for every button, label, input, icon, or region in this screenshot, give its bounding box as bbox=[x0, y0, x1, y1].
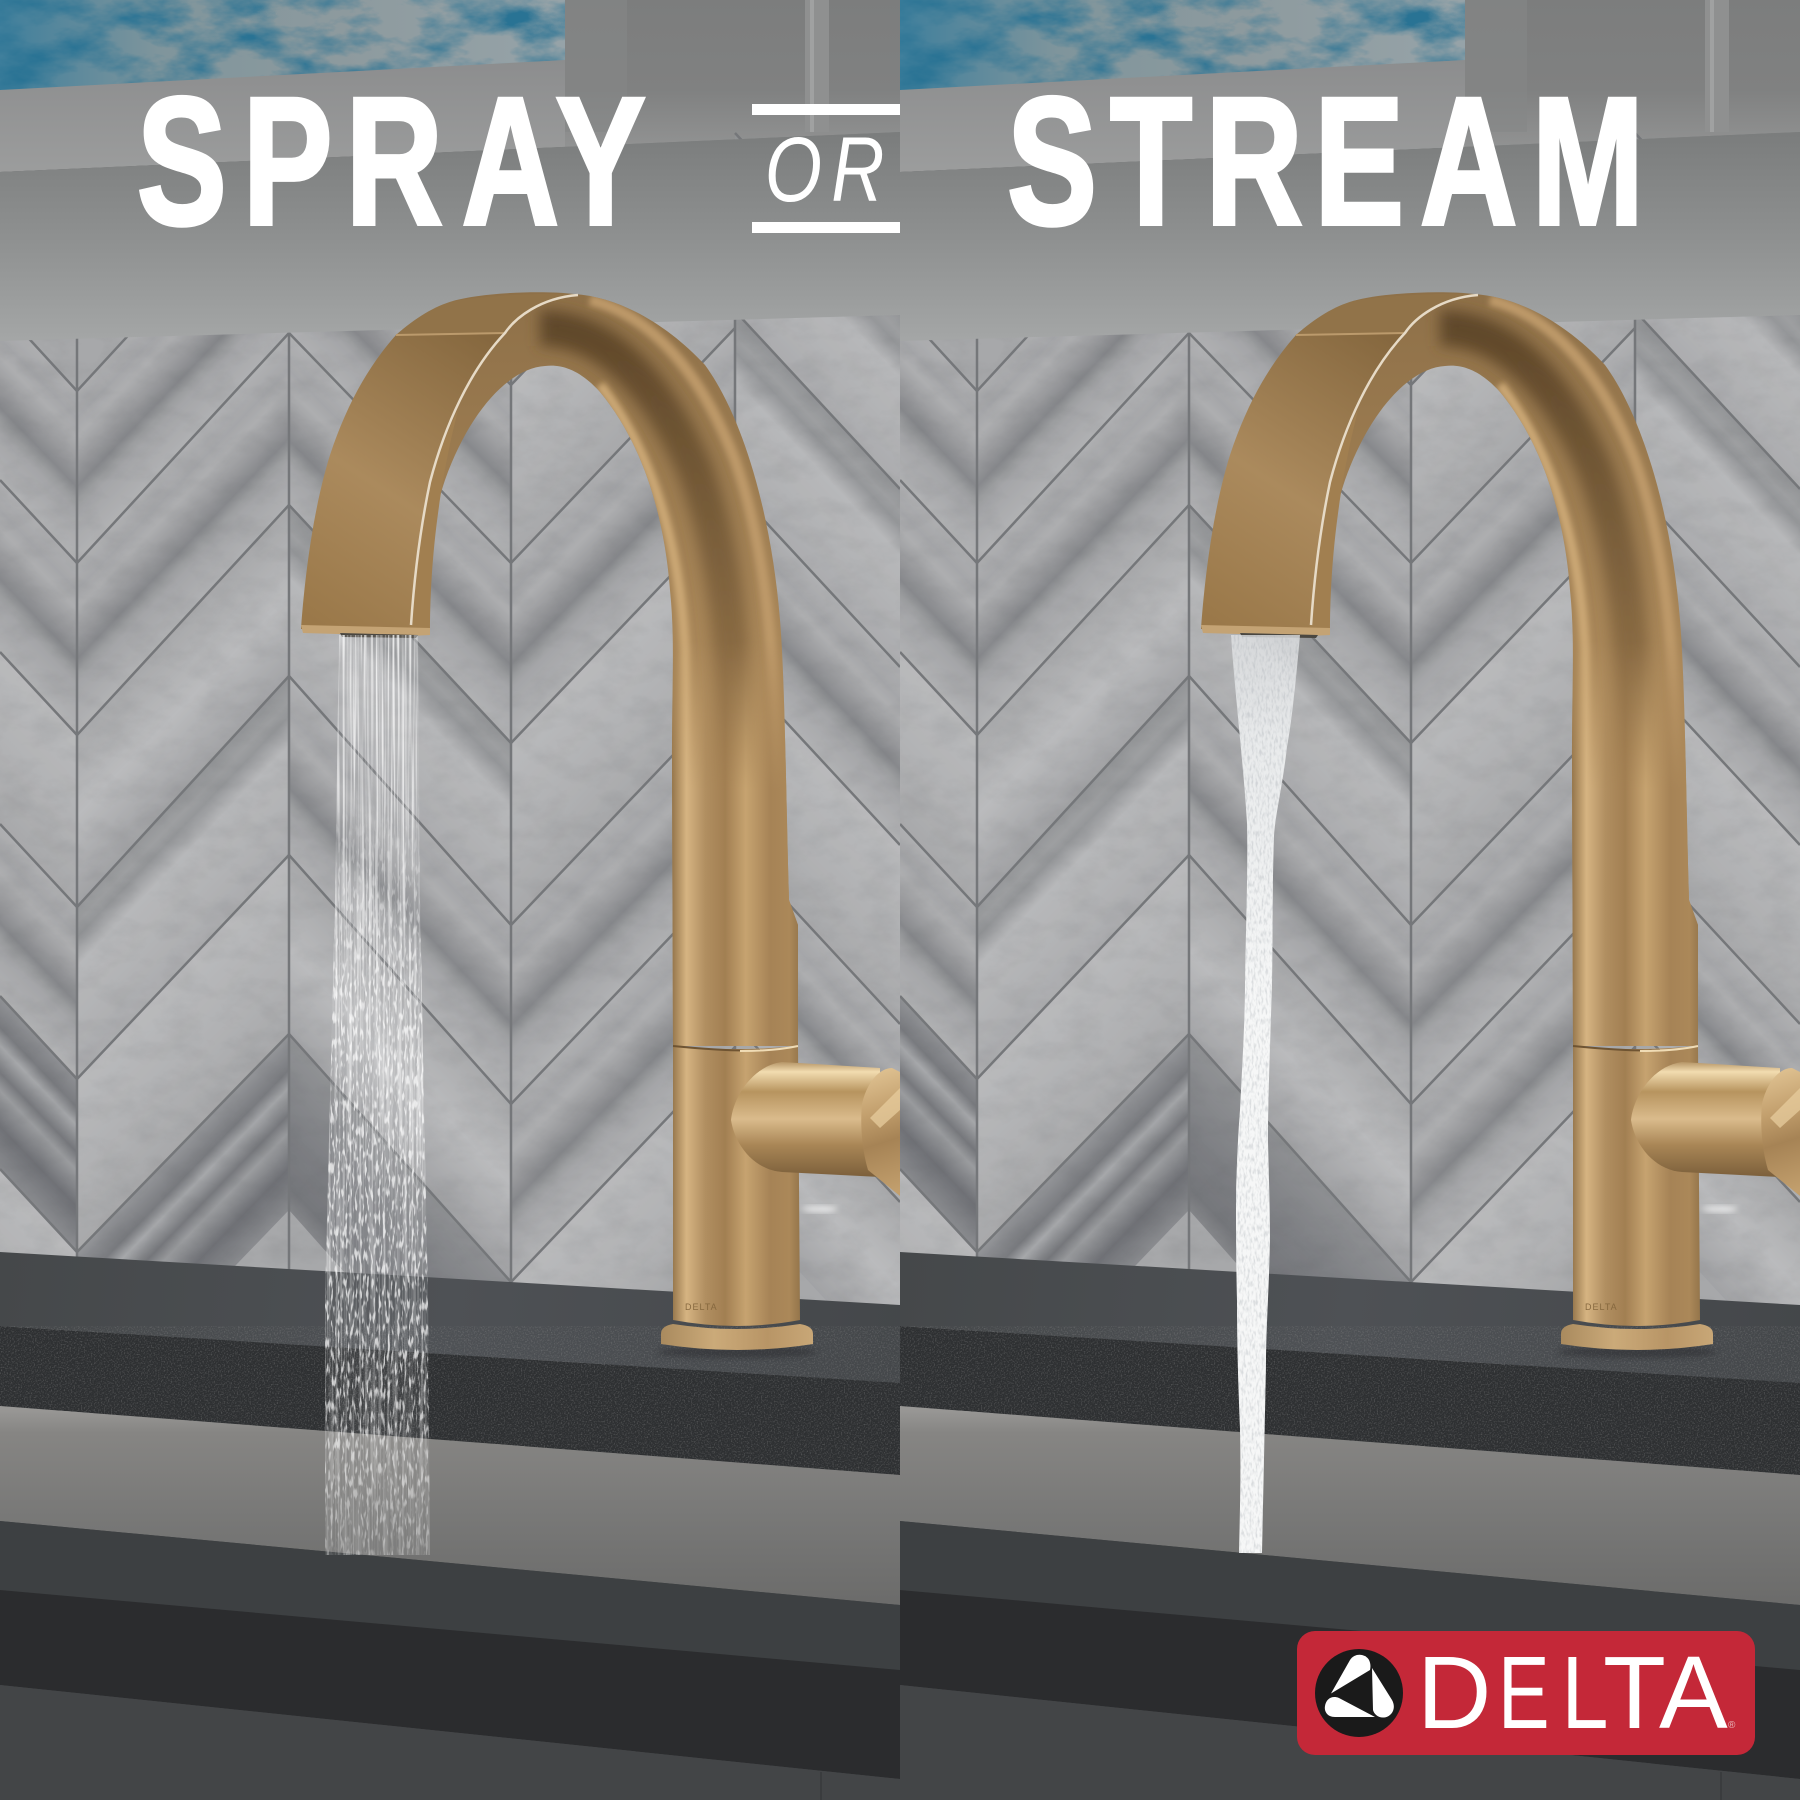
wordmark: DELTA: ® bbox=[1728, 1720, 1736, 1731]
photo scene: kitchen faucet over chevron tile bbox=[0, 0, 947, 1800]
wordmark: DELTA: E bbox=[1498, 1636, 1550, 1751]
badge: OR with rules: OR bbox=[765, 118, 884, 221]
wordmark: DELTA bbox=[1417, 1635, 1736, 1751]
stream water bbox=[1231, 635, 1300, 1553]
wordmark: DELTA: T bbox=[1603, 1635, 1666, 1750]
title: STREAM: STREAM bbox=[1007, 59, 1644, 263]
panel: spray side bbox=[0, 0, 947, 1800]
logo: Delta badge bbox=[1297, 1631, 1755, 1755]
panel: stream side bbox=[900, 0, 1800, 1800]
icon: Delta triangle mark bbox=[1315, 1649, 1403, 1737]
wordmark: DELTA: A bbox=[1659, 1635, 1728, 1750]
badge: OR with rules bbox=[752, 104, 900, 233]
wordmark: DELTA: D bbox=[1417, 1635, 1491, 1750]
spray water bbox=[320, 635, 435, 1555]
wordmark: DELTA: L bbox=[1561, 1635, 1608, 1750]
photo scene: kitchen faucet over chevron tile bbox=[900, 0, 1800, 1800]
title: SPRAY: SPRAY bbox=[137, 59, 646, 263]
